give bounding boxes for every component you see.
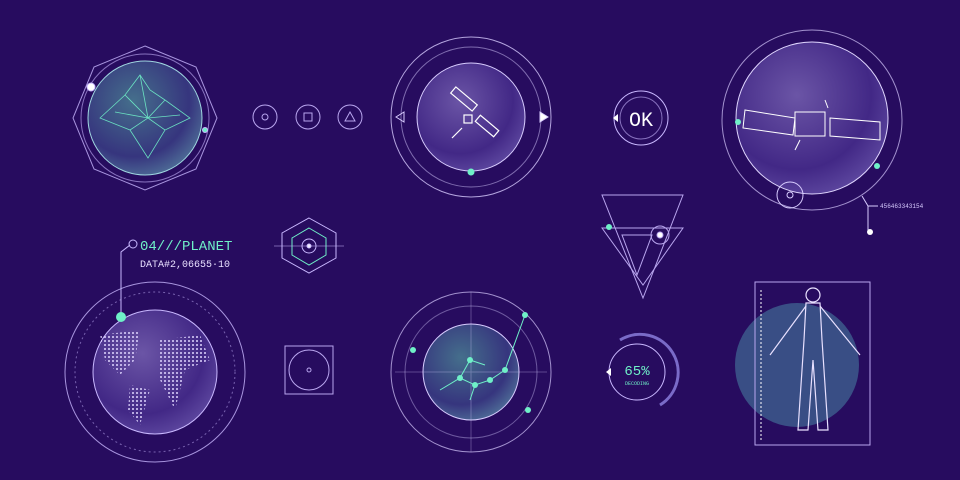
panel: planet label bbox=[121, 239, 232, 316]
panel: molecule globe bbox=[391, 292, 551, 452]
panel: 65% decoding bbox=[606, 334, 678, 405]
panel: OK button: OK bbox=[629, 110, 653, 133]
panel: earth globe bbox=[65, 282, 245, 462]
panel: planet label: DATA#2,06655·10 bbox=[140, 260, 230, 271]
panel: satellite dial bbox=[391, 37, 551, 197]
icon: wireframe mountain bbox=[100, 75, 190, 158]
icon: square target bbox=[285, 346, 333, 394]
icon: small circles row bbox=[253, 105, 362, 129]
panel: big satellite globe: 456463343154 bbox=[880, 203, 924, 210]
icon: human wireframe bbox=[770, 288, 860, 430]
icon: satellite large bbox=[743, 100, 880, 150]
panel: 65% decoding: 65% bbox=[624, 364, 650, 380]
panel: OK button bbox=[613, 91, 668, 145]
panel: 65% decoding: DECODING bbox=[625, 381, 649, 387]
panel: mountain globe bbox=[73, 46, 217, 190]
icon: satellite bbox=[451, 87, 499, 138]
panel: human scan bbox=[735, 282, 870, 445]
icon: hexagon bbox=[274, 218, 344, 273]
panel: planet label: 04///PLANET bbox=[140, 239, 232, 255]
icon: triangles bbox=[602, 195, 683, 298]
panel: big satellite globe bbox=[722, 30, 924, 235]
